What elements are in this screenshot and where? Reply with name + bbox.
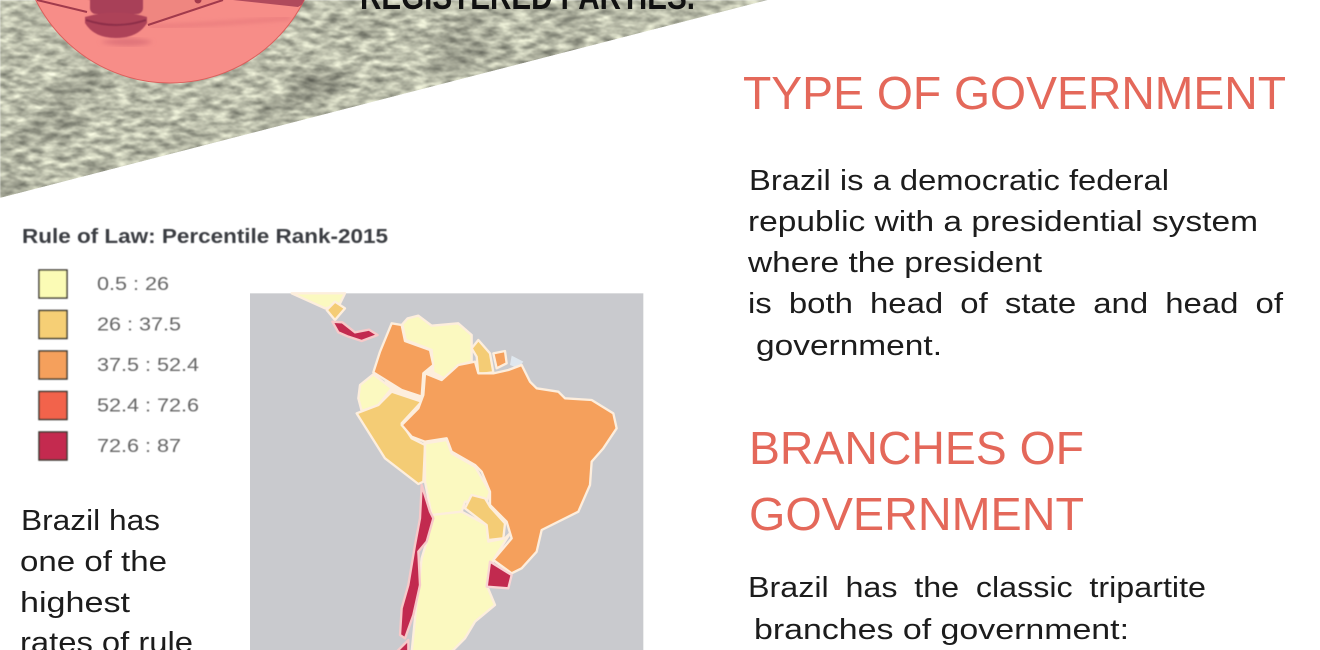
panel: grass photo banner <box>0 0 768 198</box>
heading: branches of government: GOVERNMENT <box>749 488 1084 540</box>
text block: rule of law note: one of the <box>20 546 167 578</box>
text block: type of government <box>747 165 1284 362</box>
heading: branches of government: BRANCHES OF <box>749 422 1084 474</box>
text block: type of government: is both head of state and head of <box>748 288 1284 320</box>
legend: rule of law percentile ranges: 26 : 37.5 <box>97 314 181 334</box>
text block: type of government: government. <box>756 330 942 362</box>
map: South America rule of law <box>250 293 643 650</box>
text block: rule of law note <box>20 505 193 650</box>
heading: type of government: TYPE OF GOVERNMENT <box>743 67 1286 119</box>
text block: branches of government <box>748 572 1206 646</box>
heading: branches of government <box>749 422 1084 540</box>
text block: type of government: Brazil is a democratic federal <box>749 165 1169 197</box>
text block: branches of government: branches of government: <box>754 614 1129 646</box>
text block: type of government: where the president <box>747 247 1042 279</box>
legend: rule of law percentile ranges: 52.4 : 72.6 <box>97 396 199 416</box>
heading: rule of law legend title: Rule of Law: Percentile Rank-2015 <box>22 226 388 248</box>
legend: rule of law percentile ranges <box>39 270 199 460</box>
legend: rule of law percentile ranges: 72.6 : 87 <box>97 436 181 456</box>
text block: type of government: republic with a presidential system <box>748 206 1258 238</box>
text block: rule of law note: highest <box>20 587 130 619</box>
legend: rule of law percentile ranges: 0.5 : 26 <box>97 274 169 294</box>
text block: rule of law note: Brazil has <box>21 505 160 537</box>
legend: rule of law percentile ranges: 37.5 : 52.4 <box>97 355 199 375</box>
text block: branches of government: Brazil has the classic tripartite <box>748 572 1206 604</box>
icon: gavel in red circle <box>20 0 320 83</box>
